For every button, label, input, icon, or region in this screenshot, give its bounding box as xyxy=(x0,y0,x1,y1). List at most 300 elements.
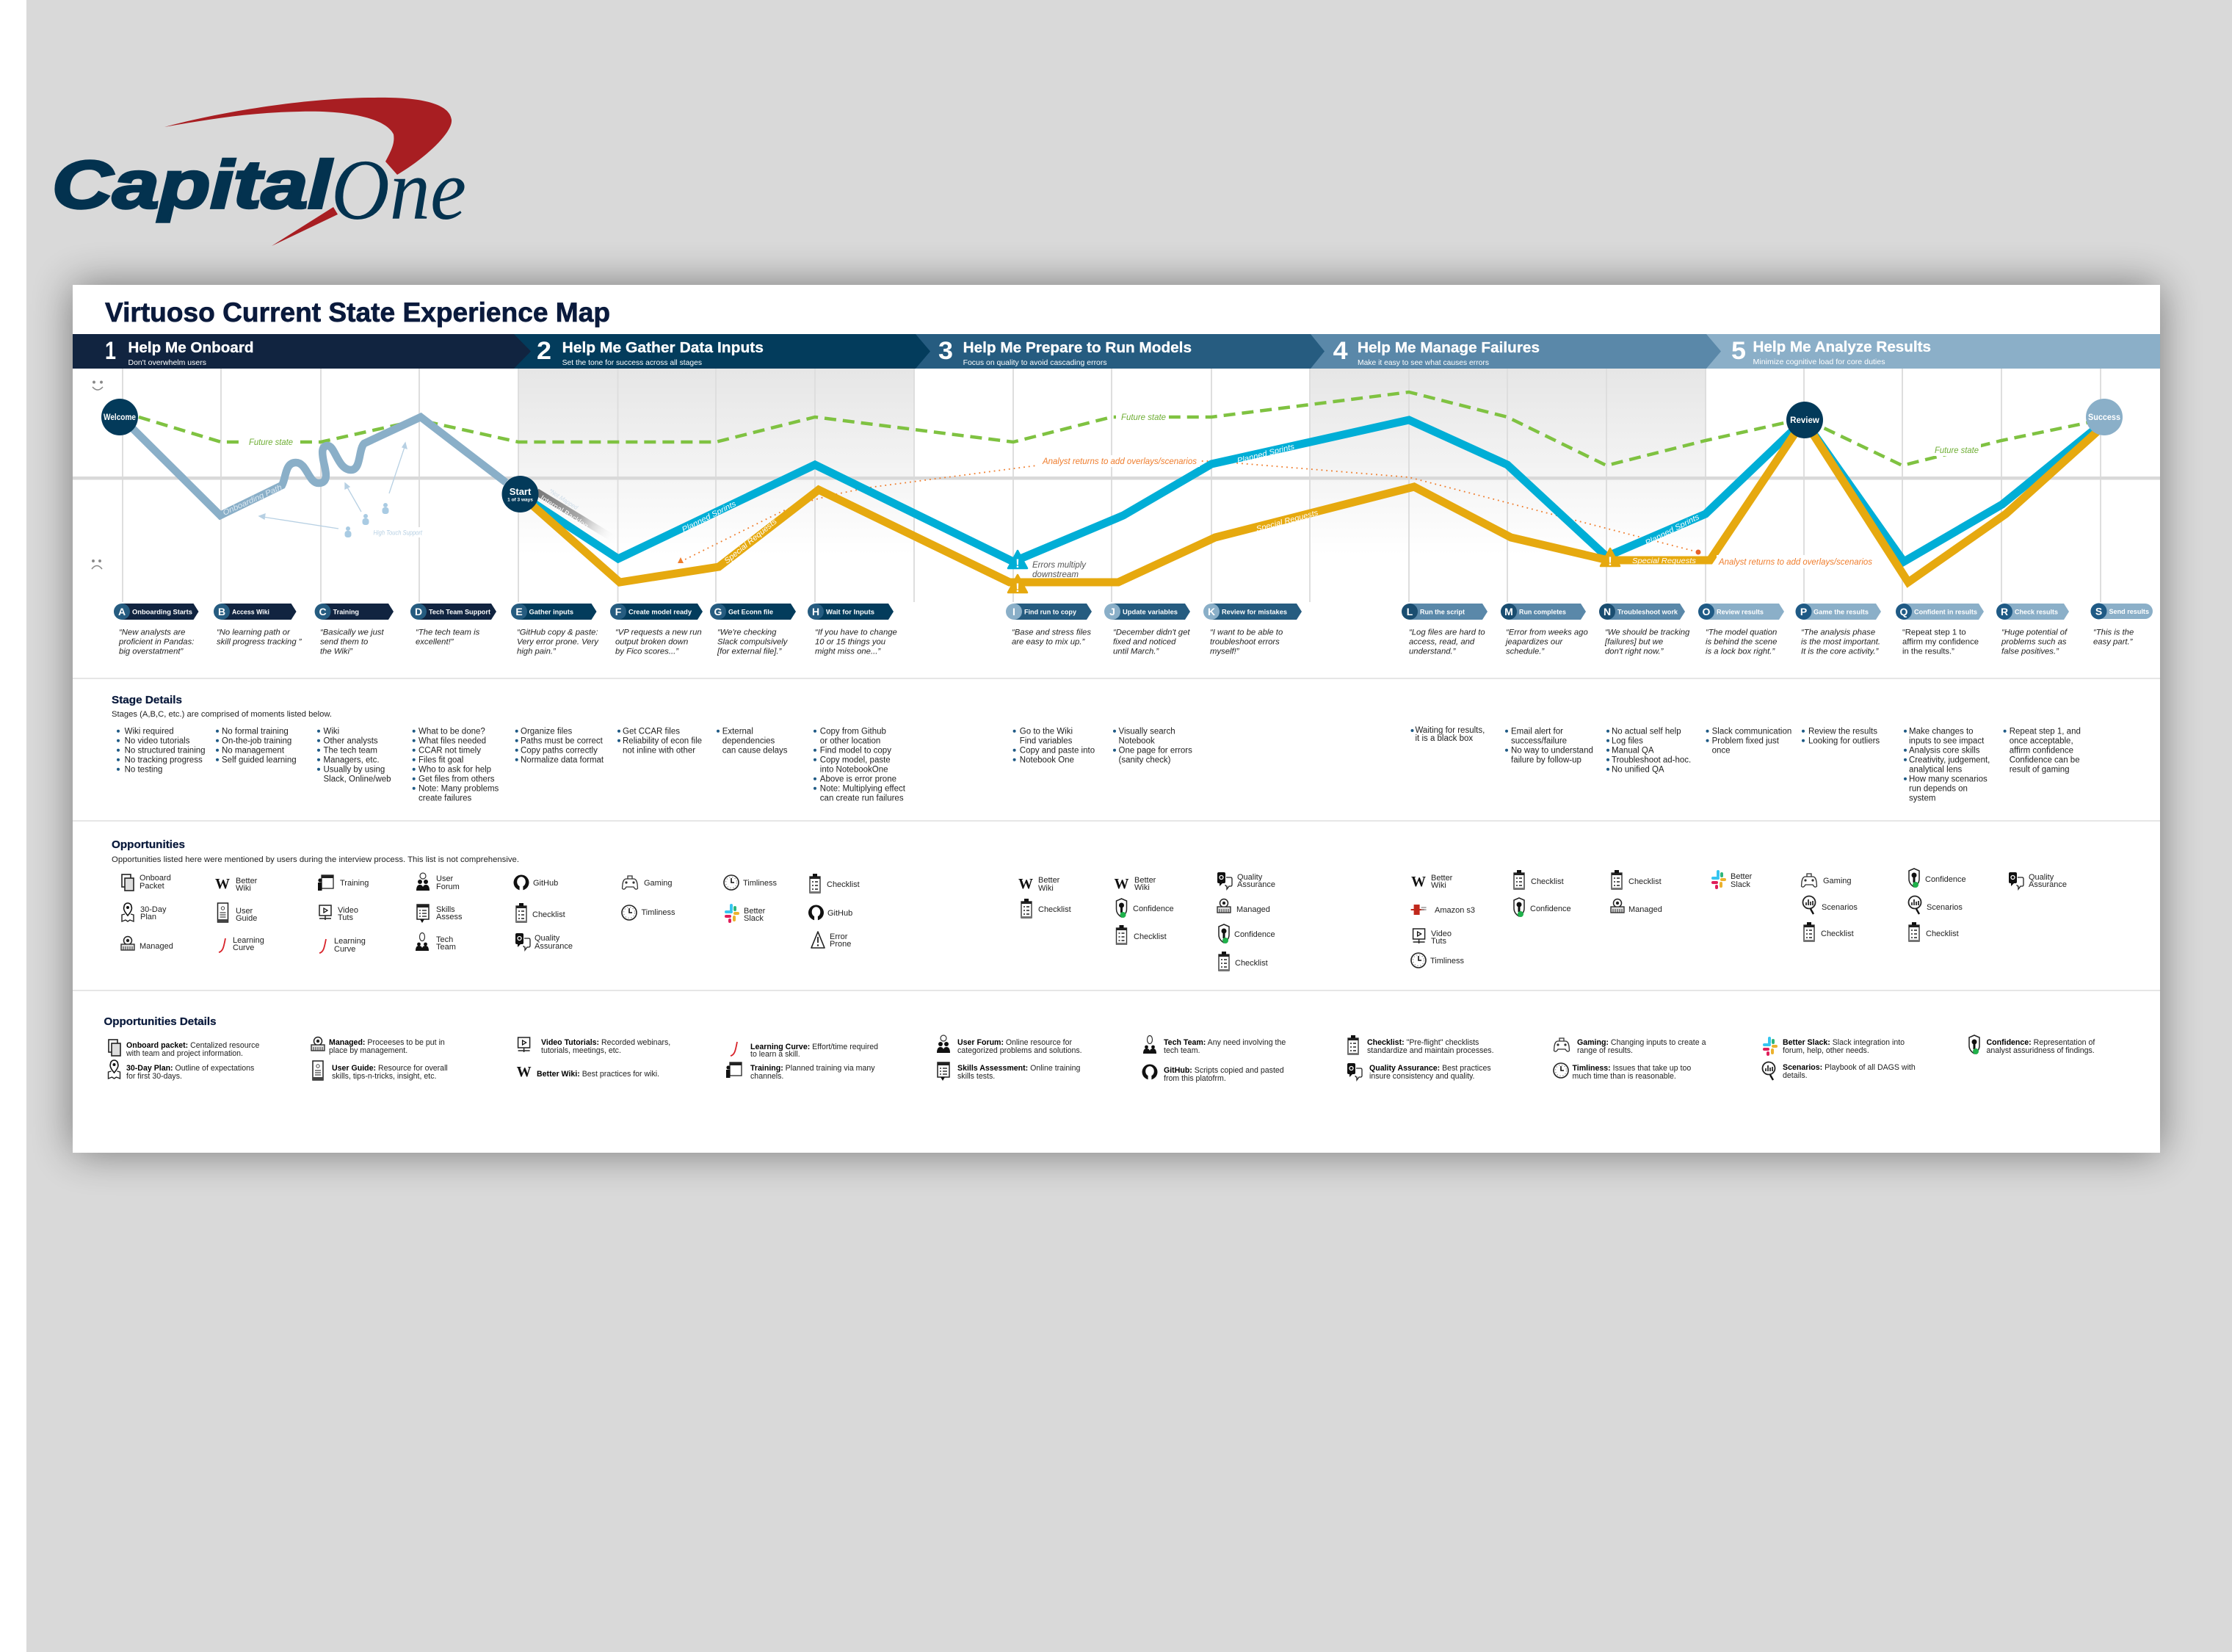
card shadow xyxy=(73,285,2160,1153)
detail: tech team xyxy=(1143,1035,1286,1055)
chip L: L xyxy=(1407,606,1413,617)
quote H: might miss one...” xyxy=(815,648,881,656)
chip O: Review results xyxy=(1717,608,1764,617)
high touch support annotation xyxy=(259,443,424,537)
label: analyst returns 1: Analyst returns to add overlays/scenarios xyxy=(1042,456,1197,466)
detail: quality assurance: insure consistency and quality. xyxy=(1369,1072,1474,1081)
chip M xyxy=(1501,604,1586,620)
details column P: Looking for outliers xyxy=(1808,737,1880,746)
high touch support annotation: High Touch Support xyxy=(373,529,422,537)
details column Q: inputs to see impact xyxy=(1909,737,1985,746)
opportunity: gaming xyxy=(1802,874,1852,887)
stage 5 band xyxy=(1689,334,2160,369)
opportunity: checklist xyxy=(1804,922,1854,941)
detail: quality assurance: Best practices xyxy=(1440,1064,1491,1073)
detail: 30-day plan xyxy=(109,1060,254,1081)
label: analyst returns 2: Analyst returns to add overlays/scenarios xyxy=(1718,557,1872,567)
quote J: fixed and noticed xyxy=(1113,637,1176,646)
opportunity: gaming: Gaming xyxy=(644,879,673,888)
quote L: “Log files are hard to xyxy=(1409,628,1485,637)
details column D: Who to ask for help xyxy=(418,766,491,775)
chip F: Create model ready xyxy=(628,608,692,617)
quote L: access, read, and xyxy=(1409,637,1475,646)
detail: user guide xyxy=(313,1061,448,1081)
quote M: schedule.” xyxy=(1506,648,1545,656)
opportunity: quality assurance: Quality xyxy=(2029,873,2054,882)
chip H: Wait for Inputs xyxy=(826,608,874,617)
chip R: Check results xyxy=(2015,608,2058,617)
chip M: Run completes xyxy=(1519,608,1566,617)
warning: blue at I xyxy=(1008,551,1027,570)
opportunity: user guide xyxy=(217,903,257,923)
opportunity: better slack xyxy=(725,904,766,923)
details column F xyxy=(617,728,702,756)
chip Q: Q xyxy=(1900,606,1908,617)
opportunity: checklist: Checklist xyxy=(1821,930,1854,938)
quote F: output broken down xyxy=(615,637,688,646)
detail: skills assessment: Online training xyxy=(1028,1064,1081,1073)
quote K: troubleshoot errors xyxy=(1210,637,1280,646)
stage 2 band xyxy=(499,334,930,369)
opportunity: quality assurance: Quality xyxy=(1237,873,1263,882)
detail: better slack: Slack integration into xyxy=(1830,1038,1905,1047)
details column M: Email alert for xyxy=(1511,728,1563,736)
detail: better wiki: Best practices for wiki. xyxy=(580,1070,659,1079)
details column A: No testing xyxy=(125,766,162,775)
chip I: Find run to copy xyxy=(1024,608,1077,617)
chip H xyxy=(808,604,894,620)
detail: user forum: Online resource for xyxy=(1004,1038,1072,1047)
detail: video tutorials xyxy=(518,1037,670,1055)
stage 2 band: Help Me Gather Data Inputs xyxy=(562,339,764,356)
details column J: Visually search xyxy=(1119,728,1175,736)
details column M: success/failure xyxy=(1511,737,1567,746)
details column Q xyxy=(1904,728,1990,803)
stage 4 band: Make it easy to see what causes errors xyxy=(1358,358,1489,367)
quote J: “December didn't get xyxy=(1113,628,1190,637)
opportunity: user guide: User xyxy=(236,907,253,916)
shaded stage regions xyxy=(518,369,1706,602)
special requests line xyxy=(520,420,2104,582)
details column F: not inline with other xyxy=(623,747,695,756)
opportunity: video tuts: Tuts xyxy=(338,913,353,922)
label: future state 3: Future state xyxy=(1935,445,1979,455)
heading: opportunities details: Opportunities Details xyxy=(104,1015,216,1028)
chip R: R xyxy=(2001,606,2008,617)
chip J: Update variables xyxy=(1123,608,1178,617)
icon: happy face xyxy=(93,381,103,390)
details column A: No tracking progress xyxy=(125,756,203,765)
chip K xyxy=(1203,604,1302,620)
stage header band xyxy=(73,334,2160,369)
stage 2 band: 2 xyxy=(537,337,551,365)
detail: user guide: User Guide: xyxy=(332,1064,376,1073)
details column L: it is a black box xyxy=(1416,734,1473,743)
quote Q: affirm my confidence xyxy=(1902,637,1979,646)
quote R: problems such as xyxy=(2001,637,2067,646)
opportunity: timliness xyxy=(724,875,778,890)
details column D xyxy=(413,728,499,803)
logo swoosh xyxy=(164,98,452,246)
quote A: “New analysts are xyxy=(119,628,185,637)
node: review xyxy=(1786,402,1823,438)
detail: timliness: Timliness: xyxy=(1573,1064,1611,1073)
details column I: Copy and paste into xyxy=(1020,747,1095,756)
chip P: Game the results xyxy=(1813,608,1869,617)
opportunity: checklist: Checklist xyxy=(532,910,565,919)
detail: scenarios: Scenarios: xyxy=(1783,1063,1822,1072)
chip J: J xyxy=(1109,606,1115,617)
details column P: Review the results xyxy=(1808,728,1877,736)
quote J: until March.” xyxy=(1113,648,1159,656)
orange dotted return path xyxy=(681,461,1698,562)
opportunity: better wiki: Better xyxy=(236,877,258,885)
details column Q: Make changes to xyxy=(1909,728,1974,736)
detail: onboard packet: with team and project information. xyxy=(126,1049,243,1058)
details column H: Copy from Github xyxy=(820,728,886,736)
quote A: proficient in Pandas: xyxy=(118,637,194,646)
quote G: Slack compulsively xyxy=(717,637,789,646)
node: start: 1 of 3 ways xyxy=(507,498,533,502)
details column L: Waiting for results, xyxy=(1416,726,1485,735)
details column C xyxy=(317,728,391,784)
opportunity: scenarios: Scenarios xyxy=(1822,903,1858,912)
details column I: Go to the Wiki xyxy=(1020,728,1073,736)
label: not mapped: *Not Mapped xyxy=(548,487,579,511)
opportunity: managed xyxy=(121,937,173,951)
details column H: can create run failures xyxy=(820,794,904,803)
detail: confidence: analyst assuridness of findings. xyxy=(1987,1046,2095,1055)
opportunity: skills assess xyxy=(417,905,463,923)
detail: checklist xyxy=(1348,1035,1494,1055)
opportunity: onboard packet xyxy=(122,874,171,891)
opportunity: confidence xyxy=(1909,869,1966,888)
opportunity: better slack: Slack xyxy=(744,914,764,923)
warning: yellow at N xyxy=(1601,548,1620,568)
opportunity: video tuts: Video xyxy=(1431,930,1452,938)
logo wordmark: Capital: Capital xyxy=(52,148,333,222)
chip O xyxy=(1698,604,1784,620)
detail: better slack: Better Slack: xyxy=(1783,1038,1830,1047)
chip N: N xyxy=(1604,606,1611,617)
panel: opportunities xyxy=(112,838,2067,971)
quote S: “This is the xyxy=(2093,628,2134,637)
stage 4 band: 4 xyxy=(1333,337,1348,365)
label: errors multiply downstream: Errors multiply xyxy=(1032,559,1087,570)
quote I: “Base and stress files xyxy=(1012,628,1091,637)
opportunity: managed xyxy=(1611,899,1662,914)
stage 1 band xyxy=(73,334,531,369)
label: internal backlog: Internal Backlog xyxy=(538,493,590,531)
opportunity: checklist: Checklist xyxy=(1038,905,1071,914)
details column R: affirm confidence xyxy=(2010,747,2073,756)
details column A: No video tutorials xyxy=(125,737,190,746)
detail: github xyxy=(1142,1065,1284,1083)
opportunity: managed: Managed xyxy=(1628,905,1662,914)
panel: stage details xyxy=(112,694,2081,803)
quote N: [failures] but we xyxy=(1604,637,1663,646)
chip B xyxy=(214,604,297,620)
details column C: Usually by using xyxy=(323,766,385,775)
stage 5 band: Help Me Analyze Results xyxy=(1753,338,1931,355)
label: future state 1: Future state xyxy=(249,437,293,447)
opportunity: scenarios xyxy=(1803,896,1858,914)
chip A xyxy=(114,604,198,620)
detail: quality assurance: Quality Assurance: xyxy=(1369,1064,1440,1073)
details column B: No management xyxy=(222,747,285,756)
opportunity: user guide: Guide xyxy=(236,914,257,923)
heading: opportunities: Opportunities xyxy=(112,838,185,851)
opportunity: 30-day plan: 30-Day xyxy=(140,905,167,914)
quote P: is the most important. xyxy=(1801,637,1880,646)
quote C: the Wiki” xyxy=(320,648,353,656)
detail: confidence: Confidence: xyxy=(1987,1038,2032,1047)
details column C: Wiki xyxy=(323,728,339,736)
quote R: “Huge potential of xyxy=(2001,628,2068,637)
opportunity: managed xyxy=(1217,899,1270,914)
opportunity: timliness: Timliness xyxy=(1430,957,1465,966)
details column Q: How many scenarios xyxy=(1909,775,1988,784)
opportunity: gaming xyxy=(623,876,673,889)
opportunity: video tuts: Video xyxy=(338,906,358,915)
details column D: Note: Many problems xyxy=(418,785,499,794)
opportunity: checklist xyxy=(1021,899,1071,918)
chip C: C xyxy=(319,606,327,617)
opportunity: user forum: User xyxy=(436,874,454,883)
detail: managed: Proceeses to be put in xyxy=(365,1038,445,1047)
opportunity: timliness xyxy=(622,905,675,920)
label: planned sprints 2: Planned Sprints xyxy=(1236,442,1296,465)
details column B: On-the-job training xyxy=(222,737,291,746)
quote O: “The model quation xyxy=(1706,628,1777,637)
details column Q: run depends on xyxy=(1909,785,1968,794)
opportunity: better wiki: W xyxy=(1411,874,1426,890)
chip F: F xyxy=(615,606,622,617)
detail: github: Scripts copied and pasted xyxy=(1192,1066,1284,1075)
details column D: create failures xyxy=(418,794,471,803)
detail: user guide: skills, tips-n-tricks, insight, etc. xyxy=(332,1072,436,1081)
detail: 30-day plan: 30-Day Plan: xyxy=(126,1064,173,1073)
opportunity: skills assess: Skills xyxy=(436,905,455,914)
chip N: Troubleshoot work xyxy=(1617,608,1678,617)
subheading: stage details: Stages (A,B,C, etc.) are comprised of moments listed below. xyxy=(112,710,332,719)
details column H xyxy=(814,728,906,803)
detail: confidence xyxy=(1969,1035,2095,1055)
chip G: G xyxy=(714,606,722,617)
stage 1 band: 1 xyxy=(105,337,116,365)
opportunity: better wiki xyxy=(1115,876,1156,892)
opportunity: checklist: Checklist xyxy=(1134,932,1167,941)
detail: tech team: Tech Team: xyxy=(1164,1038,1206,1047)
opportunity: timliness: Timliness xyxy=(642,908,675,917)
details column C: Slack, Online/web xyxy=(323,775,391,784)
opportunity: better wiki: W xyxy=(215,876,230,892)
logo: Capital One xyxy=(52,98,466,246)
chip F xyxy=(610,604,703,620)
opportunity: checklist xyxy=(1514,870,1564,889)
opportunity: better wiki xyxy=(1411,874,1453,890)
opportunity: github: GitHub xyxy=(533,879,558,888)
opportunity: video tuts xyxy=(319,905,358,922)
details column N: Log files xyxy=(1612,737,1643,746)
opportunity: tech team: Team xyxy=(436,943,456,952)
opportunity: quality assurance xyxy=(1217,872,1275,889)
opportunity: user forum: Forum xyxy=(436,883,460,891)
detail: quality assurance xyxy=(1347,1063,1491,1081)
label: special requests 1: Special Requests xyxy=(722,517,779,565)
details column B: Self guided learning xyxy=(222,756,297,765)
details column G xyxy=(717,728,788,756)
opportunity: better wiki: W xyxy=(1018,876,1033,892)
detail: user forum: categorized problems and solutions. xyxy=(957,1046,1082,1055)
detail: video tutorials: Video Tutorials: xyxy=(541,1038,599,1047)
detail: managed: place by management. xyxy=(329,1046,407,1055)
opportunity: error prone: Prone xyxy=(830,940,851,949)
details column H: Find model to copy xyxy=(820,747,891,756)
chip D: Tech Team Support xyxy=(429,608,491,617)
details column D: CCAR not timely xyxy=(418,747,481,756)
detail: tech team: tech team. xyxy=(1164,1046,1200,1055)
details column R xyxy=(2004,728,2081,775)
opportunity: better wiki: Wiki xyxy=(1431,881,1446,890)
quote I: are easy to mix up.” xyxy=(1012,637,1085,646)
quote B: skill progress tracking ” xyxy=(217,637,302,646)
opportunity: checklist xyxy=(1116,925,1167,944)
label: special requests 2: Special Requests xyxy=(1256,508,1319,534)
label: planned sprints 1: Planned Sprints xyxy=(681,499,738,535)
opportunity: better slack: Better xyxy=(744,907,766,916)
opportunity: confidence: Confidence xyxy=(1234,930,1275,939)
support people xyxy=(345,503,389,537)
label: errors multiply downstream xyxy=(1032,559,1087,579)
detail: managed xyxy=(311,1037,445,1055)
opportunity: quality assurance xyxy=(515,933,573,951)
details column O: once xyxy=(1712,747,1731,756)
quote C: “Basically we just xyxy=(320,628,384,637)
quote Q: “Repeat step 1 to xyxy=(1902,628,1966,637)
chip L xyxy=(1402,604,1488,620)
details column A xyxy=(117,728,206,775)
chip I: I xyxy=(1012,606,1015,617)
details column N xyxy=(1606,728,1691,775)
node: review: Review xyxy=(1790,416,1819,425)
label: planned sprints 3: Planned Sprints xyxy=(1644,512,1701,548)
chip K: K xyxy=(1208,606,1215,617)
chip K: Review for mistakes xyxy=(1222,608,1287,617)
details column E: Paths must be correct xyxy=(521,737,604,746)
opportunity: gaming: Gaming xyxy=(1823,877,1852,885)
details column H: into NotebookOne xyxy=(820,766,888,775)
quote D: excellent!” xyxy=(416,637,454,646)
opportunity: checklist xyxy=(1612,870,1662,889)
opportunity: quality assurance: Assurance xyxy=(535,942,573,951)
details column Q: Analysis core skills xyxy=(1909,747,1980,756)
stage 1 band: Help Me Onboard xyxy=(128,339,254,356)
opportunity: better wiki: W xyxy=(1115,876,1129,892)
opportunity: quality assurance xyxy=(2009,872,2067,889)
opportunity: checklist xyxy=(1219,952,1268,971)
details column R: Confidence can be xyxy=(2010,756,2080,765)
opportunity: github xyxy=(808,905,852,921)
chip J xyxy=(1104,604,1190,620)
details column O xyxy=(1706,728,1791,756)
chip D: D xyxy=(415,606,422,617)
opportunity: timliness xyxy=(1411,953,1465,968)
details column I: Find variables xyxy=(1020,737,1073,746)
opportunity: checklist xyxy=(1909,922,1959,941)
chip A: A xyxy=(118,606,126,617)
chip D xyxy=(410,604,496,620)
quote P: “The analysis phase xyxy=(1801,628,1875,637)
details column C: The tech team xyxy=(323,747,377,756)
details column H: Copy model, paste xyxy=(820,756,891,765)
detail: checklist: standardize and maintain processes. xyxy=(1367,1046,1494,1055)
node: success xyxy=(2086,399,2123,435)
opportunity: tech team: Tech xyxy=(436,935,453,944)
warning: yellow at I xyxy=(1008,575,1027,595)
opportunity: tech team xyxy=(416,932,456,952)
opportunity: learning curve xyxy=(219,936,264,952)
details column N: Troubleshoot ad-hoc. xyxy=(1612,756,1691,765)
chip Q xyxy=(1896,604,1984,620)
details column G: External xyxy=(722,728,753,736)
details column B xyxy=(216,728,297,765)
stage 3 band: Focus on quality to avoid cascading errors xyxy=(963,358,1107,367)
opportunity: learning curve: Curve xyxy=(334,945,355,954)
detail: user guide: Resource for overall xyxy=(376,1064,448,1073)
quote K: myself!” xyxy=(1210,648,1240,656)
opportunity: learning curve xyxy=(319,937,366,954)
opportunity: checklist: Checklist xyxy=(1235,959,1268,968)
detail: skills assessment xyxy=(938,1062,1081,1081)
detail: confidence: Representation of xyxy=(2032,1038,2095,1047)
stage 4 band xyxy=(1292,334,1721,369)
quote G: [for external file].” xyxy=(717,648,783,656)
quote M: jeapardizes our xyxy=(1504,637,1563,646)
detail: training: channels. xyxy=(750,1072,783,1081)
chip H: H xyxy=(812,606,819,617)
opportunity: better wiki xyxy=(215,876,258,893)
details column P xyxy=(1802,728,1880,746)
panel: opportunities details xyxy=(104,1015,2095,1083)
opportunity: confidence xyxy=(1116,899,1174,918)
detail: timliness: much time than is reasonable. xyxy=(1573,1072,1676,1081)
user quotes xyxy=(118,628,2134,656)
chip S: Send results xyxy=(2109,608,2149,616)
detail: better slack xyxy=(1763,1037,1905,1056)
chip B: Access Wiki xyxy=(232,608,269,617)
chip L: Run the script xyxy=(1420,608,1465,617)
quote F: “VP requests a new run xyxy=(615,628,702,637)
details column B: No formal training xyxy=(222,728,289,736)
marker: orange dot xyxy=(1696,549,1700,555)
detail: gaming: Gaming: xyxy=(1577,1038,1609,1047)
opportunity: learning curve: Learning xyxy=(233,936,264,945)
opportunity: better wiki: Better xyxy=(1431,874,1453,883)
chip I xyxy=(1006,604,1092,620)
label: future state 2: Future state xyxy=(1121,412,1166,422)
opportunity: skills assess: Assess xyxy=(436,913,463,921)
details column I xyxy=(1013,728,1095,765)
heading: stage details: Stage Details xyxy=(112,694,182,706)
opportunity: confidence: Confidence xyxy=(1133,905,1174,913)
onboarding path xyxy=(121,417,506,515)
quote E: “GitHub copy & paste: xyxy=(517,628,598,637)
title: Virtuoso Current State Experience Map xyxy=(105,297,610,327)
marker: orange arrowhead xyxy=(678,557,684,563)
opportunity: better slack: Slack xyxy=(1731,880,1750,889)
label: onboarding path: Onboarding Path xyxy=(222,483,283,518)
